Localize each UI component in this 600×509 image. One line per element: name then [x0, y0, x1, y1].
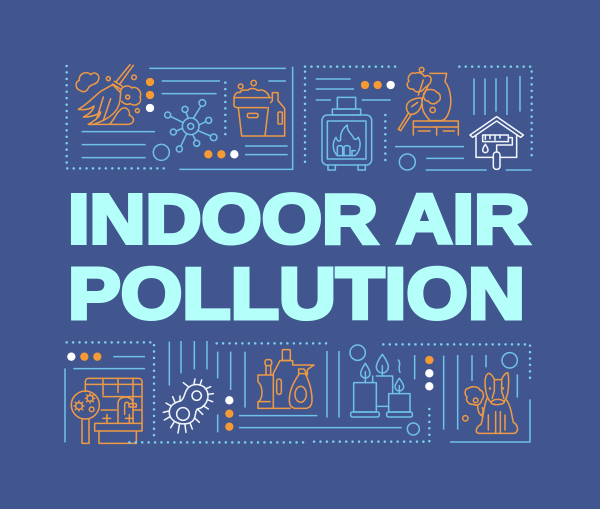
dots: top left vertical — [146, 78, 154, 112]
panel: bottom right — [129, 343, 530, 442]
icon: vase with moldy plant on cabinet — [398, 67, 458, 135]
panel: bottom left — [65, 341, 245, 442]
icon: bacterium — [163, 379, 213, 433]
icon: bucket with foam and detergent — [234, 80, 285, 136]
panel: top right — [305, 67, 532, 170]
dots: bottom middle — [225, 396, 233, 431]
icon: candles — [351, 354, 412, 417]
title line 1: INDOOR AIR — [68, 180, 530, 258]
panel: top left — [67, 66, 293, 169]
icon: house with paint roller — [470, 117, 523, 169]
dots: top left horizontal — [204, 150, 238, 158]
icon: broom sweeping dust — [76, 65, 141, 124]
dots: top right — [361, 81, 395, 89]
icon: spray and cleaning bottles — [258, 350, 314, 408]
title — [68, 180, 530, 334]
icon: bathroom with magnifier and mold — [71, 378, 142, 443]
icon: virus particle — [165, 100, 217, 152]
icon: dog with pet dander — [463, 373, 517, 433]
dots: bottom right — [425, 356, 433, 390]
title line 2: POLLUTION — [68, 254, 525, 334]
icon: wood stove — [322, 97, 372, 170]
dots: bottom left horizontal — [67, 352, 101, 361]
